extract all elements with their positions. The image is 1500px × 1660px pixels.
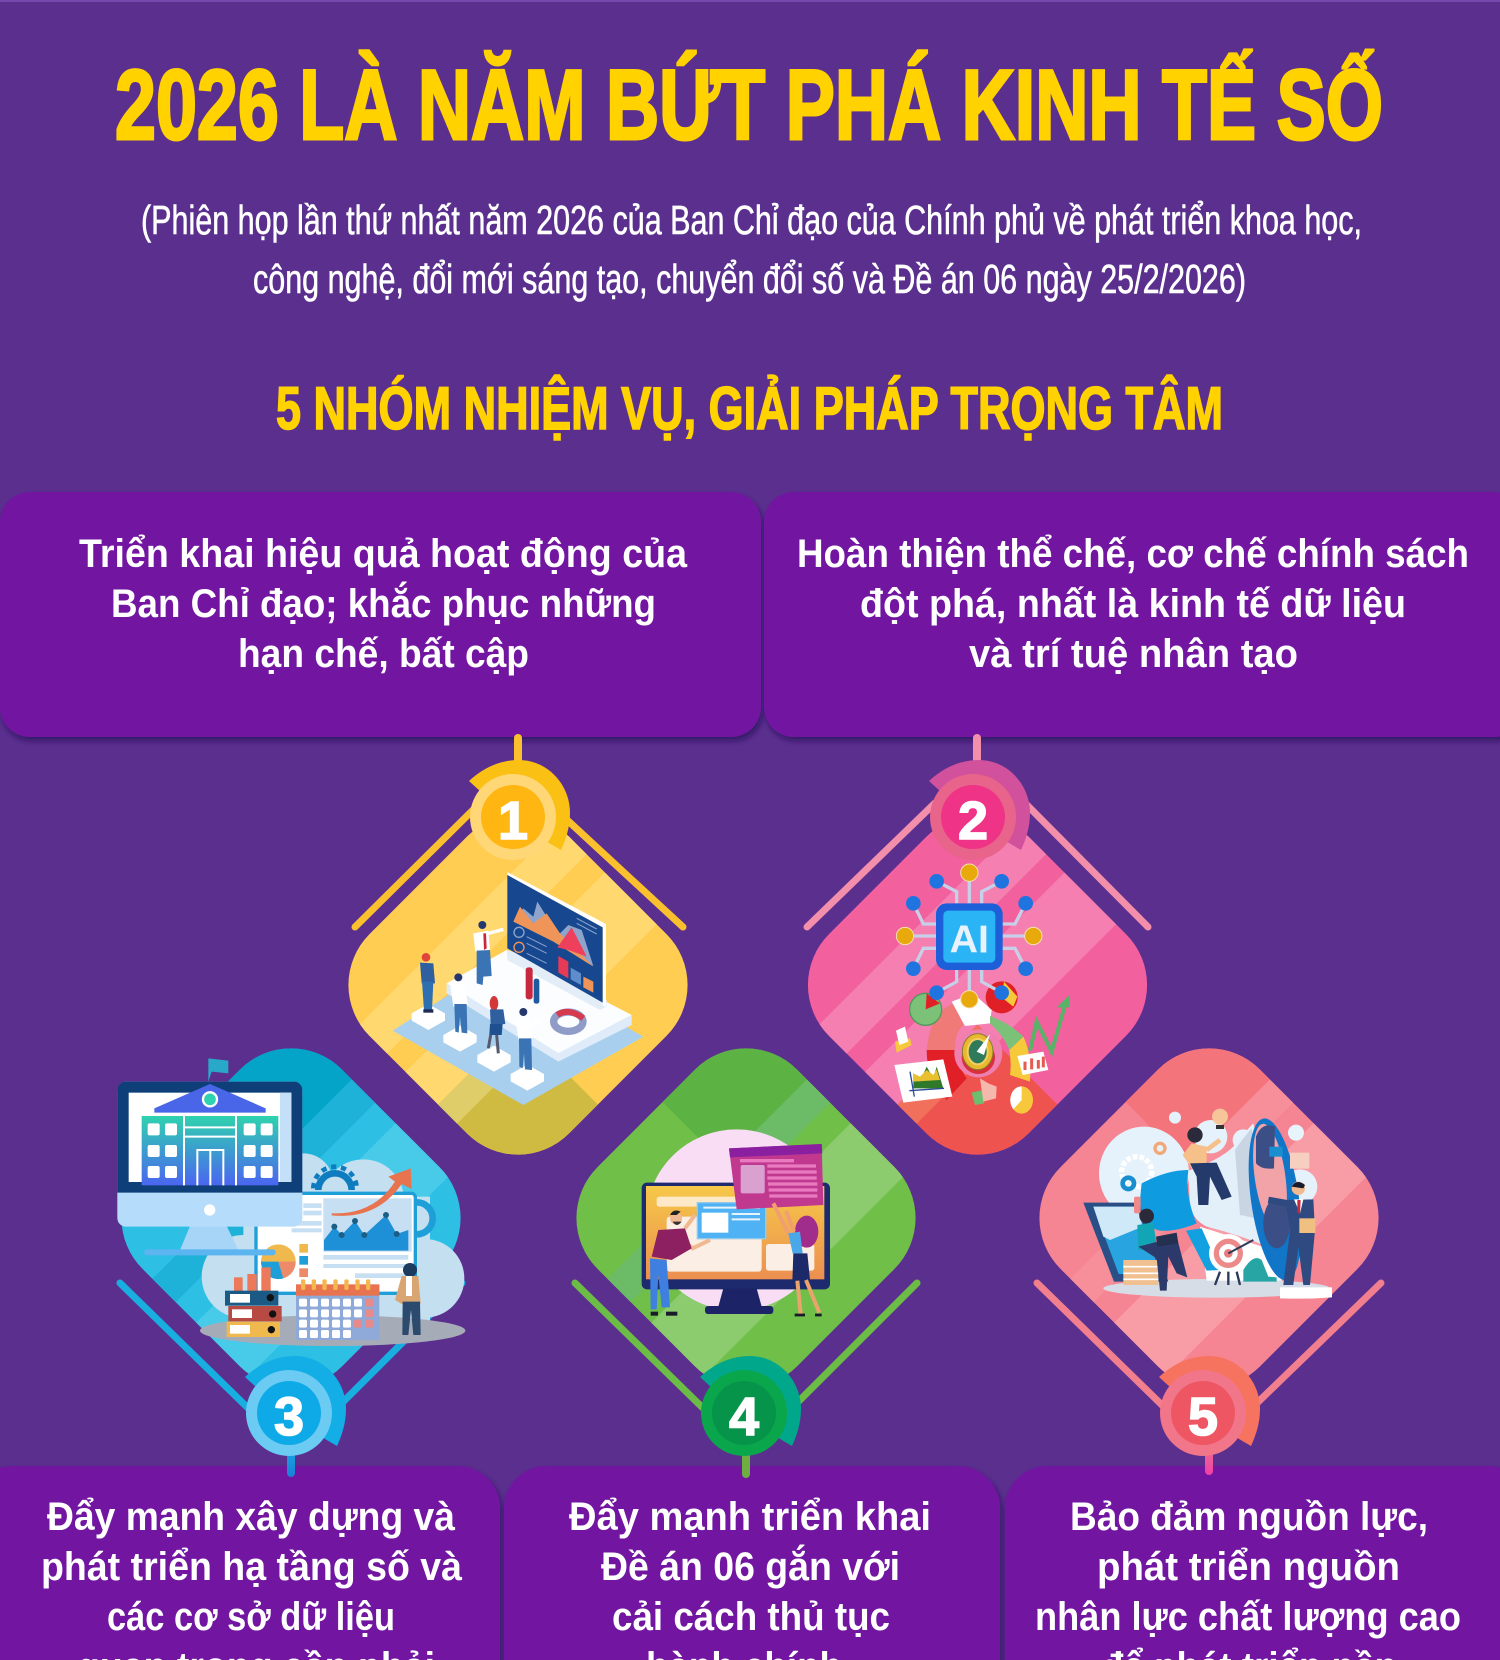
person woman: [488, 996, 505, 1053]
panel: task 3 text box: [0, 1466, 500, 1660]
panel: task 4 text box: Đẩy mạnh triển khai: [569, 1495, 931, 1539]
diamond 4 background: [576, 1048, 916, 1374]
connector lines 5: [1037, 1283, 1381, 1475]
panel: task 2 text box: đột phá, nhất là kinh tế dữ liệu: [860, 582, 1406, 626]
illustration 5: megaphone team: [1083, 1109, 1332, 1299]
connector lines 4: [575, 1283, 917, 1474]
illustration 1: data dashboard with people: [393, 872, 643, 1105]
panel: task 5 text box: Bảo đảm nguồn lực,: [1070, 1495, 1428, 1539]
panel: task 5 text box: [1005, 1466, 1500, 1660]
connector lines 2: [807, 738, 1148, 927]
woman: [773, 1203, 822, 1315]
panel: task 1 text box: Triển khai hiệu quả hoạt động của: [79, 532, 688, 576]
panel: task 1 text box: Ban Chỉ đạo; khắc phục những: [111, 580, 656, 626]
illustration 2: AI chip and gauge: [894, 864, 1070, 1114]
calendar: [296, 1279, 379, 1340]
diamond 5 background: [1039, 1048, 1379, 1376]
subtitle: [141, 197, 1362, 302]
panel: task 1 text box: hạn chế, bất cập: [238, 632, 529, 676]
illustration 3: government building monitor and planning: [117, 1058, 465, 1346]
panel: task 2 text box: [764, 492, 1500, 737]
monitor: [117, 1058, 302, 1227]
woman seated: [1137, 1209, 1187, 1291]
panel: task 5 text box: phát triển nguồn: [1097, 1545, 1400, 1589]
person back 1: [450, 973, 468, 1033]
badge 1: [469, 760, 570, 860]
person standing: [395, 1263, 421, 1335]
binders: [225, 1291, 282, 1337]
person left: [420, 953, 435, 1013]
diamond 3 background: [122, 1048, 461, 1374]
panel: task 3 text box: phát triển hạ tầng số và: [41, 1545, 463, 1589]
panel: task 2 text box: và trí tuệ nhân tạo: [969, 632, 1298, 676]
badge 3: 3: [274, 1387, 304, 1447]
badge 5: [1159, 1356, 1260, 1456]
connector lines 3: [120, 1283, 462, 1477]
badge 5: 5: [1188, 1387, 1218, 1447]
businessman: [1268, 1182, 1315, 1285]
badge 2: [929, 760, 1030, 860]
panel: task 4 text box: Đề án 06 gắn với: [601, 1543, 900, 1589]
illustration 2: AI chip and gauge: AI: [950, 917, 989, 961]
diamond 1 background: [348, 832, 688, 1155]
illustration 4: people at a monitor: [642, 1129, 830, 1316]
panel: task 5 text box: nhân lực chất lượng cao: [1035, 1595, 1461, 1639]
connector lines 1: [355, 738, 683, 927]
books: [1123, 1260, 1158, 1285]
laptop: [1083, 1203, 1168, 1282]
diamond 2 background: [808, 831, 1148, 1155]
badge 1: 1: [498, 791, 528, 851]
panel: task 3 text box: các cơ sở dữ liệu: [107, 1595, 395, 1639]
target: [1209, 1234, 1253, 1285]
megaphone: [1134, 1115, 1310, 1284]
panel: task 1 text box: [0, 492, 761, 737]
man: [650, 1211, 710, 1316]
badge 2: 2: [958, 791, 988, 851]
panel: task 4 text box: [504, 1466, 1000, 1660]
panel: task 4 text box: cải cách thủ tục: [612, 1595, 890, 1639]
badge 4: 4: [729, 1387, 759, 1447]
monitor stand: [144, 1226, 276, 1255]
badge 3: [245, 1356, 346, 1456]
person back 2: [516, 1008, 542, 1070]
badge 4: [700, 1356, 801, 1456]
man seated: [1183, 1127, 1232, 1205]
panel: task 3 text box: Đẩy mạnh xây dựng và: [47, 1495, 456, 1539]
person presenting: [473, 921, 503, 985]
